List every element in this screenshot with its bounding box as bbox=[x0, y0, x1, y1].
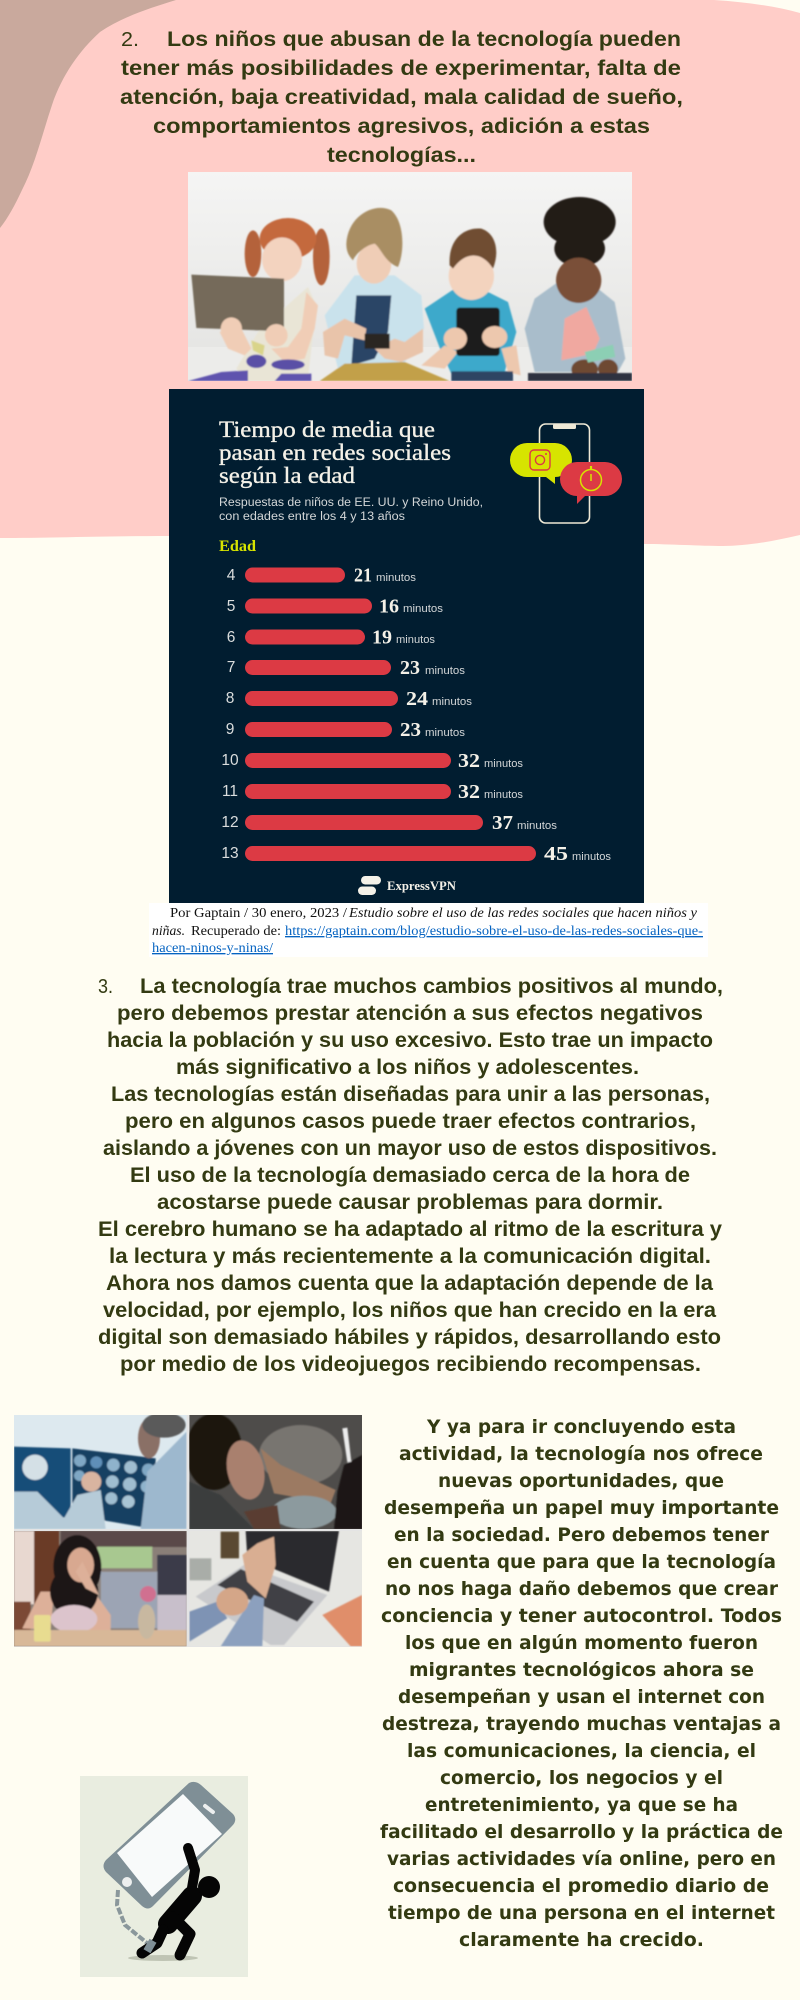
text block: point 2: Los niños que abusan de la tecnología pueden bbox=[167, 28, 681, 51]
bar chart bbox=[221, 564, 611, 865]
citation box: Estudio sobre el uso de las redes sociales que hacen niños y bbox=[348, 905, 697, 920]
row: age 13: 13 bbox=[221, 845, 239, 862]
row: age 10: 10 bbox=[221, 752, 239, 769]
row: age 7: 7 bbox=[227, 659, 235, 676]
row: age 4: 4 bbox=[227, 567, 236, 584]
icon: phone with social bubbles bbox=[510, 424, 622, 523]
row: age 9 bbox=[226, 719, 466, 741]
row: age 11 bbox=[222, 781, 523, 803]
row: age 6: 19 bbox=[372, 626, 392, 648]
girl 1 bbox=[245, 230, 261, 277]
chart title bbox=[219, 417, 451, 488]
text block: conclusion: varias actividades vía online, pero en bbox=[387, 1848, 776, 1870]
citation box: hacen-ninos-y-ninas/ bbox=[152, 940, 273, 955]
text block: point 3: El cerebro humano se ha adaptado al ritmo de la escritura y bbox=[98, 1218, 722, 1241]
pink blob background bbox=[0, 0, 800, 546]
chart title: Tiempo de media que bbox=[219, 417, 435, 442]
text block: point 3: El uso de la tecnología demasiado cerca de la hora de bbox=[130, 1164, 690, 1187]
row: age 6 bbox=[227, 626, 435, 648]
text block: conclusion: Y ya para ir concluyendo esta bbox=[426, 1416, 736, 1438]
row: age 8: 8 bbox=[226, 690, 234, 707]
text block: point 3: digital son demasiado hábiles y rápidos, desarrollando esto bbox=[98, 1326, 721, 1349]
row: age 4: 21 bbox=[354, 564, 372, 586]
chart title: pasan en redes sociales bbox=[219, 440, 451, 465]
row: age 12: minutos bbox=[517, 820, 558, 832]
row: age 4 bbox=[227, 564, 417, 586]
citation box: https://gaptain.com/blog/estudio-sobre-el-uso-de-las-redes-sociales-que- bbox=[285, 923, 704, 938]
shackle bbox=[144, 1939, 156, 1953]
row: age 4: minutos bbox=[376, 572, 417, 584]
logo: ExpressVPN bbox=[358, 876, 457, 895]
text block: point 3: La tecnología trae muchos cambios positivos al mundo, bbox=[140, 975, 723, 998]
row: age 12: 37 bbox=[492, 812, 513, 834]
text block: point 3: 3. bbox=[98, 976, 113, 998]
brown corner blob bbox=[0, 0, 176, 228]
text block: point 2: tecnologías... bbox=[327, 144, 476, 167]
text block: conclusion: comercio, los negocios y el bbox=[440, 1767, 723, 1789]
chart title: según la edad bbox=[219, 463, 356, 488]
text block: point 2: comportamientos agresivos, adición a estas bbox=[153, 115, 650, 138]
boy 2 bbox=[325, 275, 424, 369]
text block: conclusion: destreza, trayendo muchas ventajas a bbox=[382, 1713, 781, 1735]
phone bbox=[104, 1782, 235, 1908]
row: age 7 bbox=[227, 657, 466, 679]
text block: conclusion: consecuencia el promedio diario de bbox=[393, 1875, 769, 1897]
text block: conclusion: las comunicaciones, la ciencia, el bbox=[407, 1740, 756, 1762]
photo: tired woman at a cafe bbox=[14, 1531, 187, 1646]
row: age 7: minutos bbox=[425, 665, 466, 677]
text block: conclusion: no nos haga daño debemos que crear bbox=[385, 1578, 779, 1600]
row: age 5: 5 bbox=[227, 598, 235, 615]
text block: point 3: más significativo a los niños y adolescentes. bbox=[176, 1056, 639, 1079]
chain bbox=[117, 1890, 147, 1943]
row: age 5: minutos bbox=[403, 603, 444, 615]
photo: doctors reviewing brain scans bbox=[14, 1412, 187, 1529]
citation box bbox=[149, 903, 708, 957]
text block: point 3: Ahora nos damos cuenta que la adaptación depende de la bbox=[106, 1272, 713, 1295]
photo: wrist pain at a laptop bbox=[189, 1531, 362, 1646]
photo: woman on phone in bed bbox=[186, 1413, 362, 1529]
logo: ExpressVPN: ExpressVPN bbox=[387, 878, 457, 893]
photo collage: effects of technology bbox=[14, 1412, 362, 1647]
text block: conclusion: conciencia y tener autocontrol. Todos bbox=[381, 1605, 782, 1627]
row: age 5 bbox=[227, 596, 444, 618]
row: age 13 bbox=[221, 843, 611, 865]
girl 4 bbox=[525, 282, 625, 372]
text block: conclusion: desempeñan y usan el internet con bbox=[398, 1686, 765, 1708]
row: age 5: 16 bbox=[379, 596, 399, 618]
text block: point 3: acostarse puede causar problemas para dormir. bbox=[157, 1191, 663, 1214]
text block: point 3 bbox=[98, 975, 723, 1376]
row: age 9: 9 bbox=[226, 721, 234, 738]
text block: conclusion: facilitado el desarrollo y la práctica de bbox=[380, 1821, 783, 1843]
text block: conclusion: en la sociedad. Pero debemos tener bbox=[394, 1524, 770, 1546]
text block: conclusion: migrantes tecnológicos ahora se bbox=[409, 1659, 754, 1681]
row: age 9: 23 bbox=[400, 719, 421, 741]
citation box: Por Gaptain / 30 enero, 2023 / bbox=[170, 905, 347, 920]
row: age 10: minutos bbox=[484, 758, 523, 770]
text block: point 3: velocidad, por ejemplo, los niños que han crecido en la era bbox=[103, 1299, 716, 1322]
row: age 9: minutos bbox=[425, 727, 466, 739]
text block: conclusion: actividad, la tecnología nos ofrece bbox=[399, 1443, 763, 1465]
row: age 10 bbox=[221, 750, 523, 772]
row: age 8: minutos bbox=[432, 696, 473, 708]
text block: conclusion: en cuenta que para que la tecnología bbox=[387, 1551, 776, 1573]
row: age 8: 24 bbox=[406, 688, 428, 710]
text block: point 3: por medio de los videojuegos recibiendo recompensas. bbox=[120, 1353, 701, 1376]
text block: point 3: Las tecnologías están diseñadas para unir a las personas, bbox=[111, 1083, 710, 1106]
row: age 11: 32 bbox=[458, 781, 480, 803]
text block: point 3: pero en algunos casos puede traer efectos contrarios, bbox=[125, 1110, 696, 1133]
text block: conclusion: desempeña un papel muy importante bbox=[384, 1497, 779, 1519]
row: age 13: minutos bbox=[572, 851, 611, 863]
text block: point 3: la lectura y más recientemente a la comunicación digital. bbox=[109, 1245, 711, 1268]
text block: point 2 bbox=[120, 28, 683, 167]
row: age 7: 23 bbox=[400, 657, 420, 679]
text block: point 3: pero debemos prestar atención a sus efectos negativos bbox=[117, 1002, 703, 1025]
row: age 8 bbox=[226, 688, 473, 710]
text block: point 2: 2. bbox=[121, 29, 139, 51]
axis label: Edad: Edad bbox=[219, 538, 256, 555]
citation box: niñas. bbox=[152, 923, 185, 938]
boy 3 bbox=[425, 289, 516, 374]
row: age 11: minutos bbox=[484, 789, 523, 801]
text block: point 3: aislando a jóvenes con un mayor uso de estos dispositivos. bbox=[103, 1137, 717, 1160]
text block: point 3: hacia la población y su uso excesivo. Esto trae un impacto bbox=[107, 1029, 713, 1052]
text block: point 2: tener más posibilidades de experimentar, falta de bbox=[121, 57, 681, 80]
text block: conclusion: tiempo de una persona en el internet bbox=[388, 1902, 775, 1924]
text block: conclusion bbox=[380, 1416, 783, 1951]
text block: conclusion: claramente ha crecido. bbox=[459, 1929, 704, 1951]
row: age 13: 45 bbox=[544, 843, 568, 865]
citation box: Recuperado de: bbox=[191, 923, 281, 938]
panel: social media time chart bbox=[169, 389, 644, 903]
row: age 6: 6 bbox=[227, 629, 235, 646]
person silhouette bbox=[142, 1848, 195, 1955]
row: age 6: minutos bbox=[396, 634, 435, 646]
text block: point 2: atención, baja creatividad, mala calidad de sueño, bbox=[120, 86, 683, 109]
photo: four children using devices bbox=[188, 172, 632, 381]
row: age 12: 12 bbox=[221, 814, 239, 831]
shadow bbox=[128, 1955, 198, 1961]
text block: conclusion: nuevas oportunidades, que bbox=[438, 1470, 724, 1492]
text block: conclusion: los que en algún momento fueron bbox=[405, 1632, 758, 1654]
row: age 12 bbox=[221, 812, 558, 834]
chart subtitle bbox=[219, 497, 483, 523]
illustration: person carrying giant chained phone bbox=[80, 1776, 248, 1977]
row: age 11: 11 bbox=[222, 783, 238, 800]
text block: conclusion: entretenimiento, ya que se ha bbox=[425, 1794, 738, 1816]
chart subtitle: Respuestas de niños de EE. UU. y Reino Unido, bbox=[219, 497, 483, 509]
chart subtitle: con edades entre los 4 y 13 años bbox=[219, 511, 405, 523]
row: age 10: 32 bbox=[458, 750, 480, 772]
head bbox=[198, 1876, 220, 1898]
